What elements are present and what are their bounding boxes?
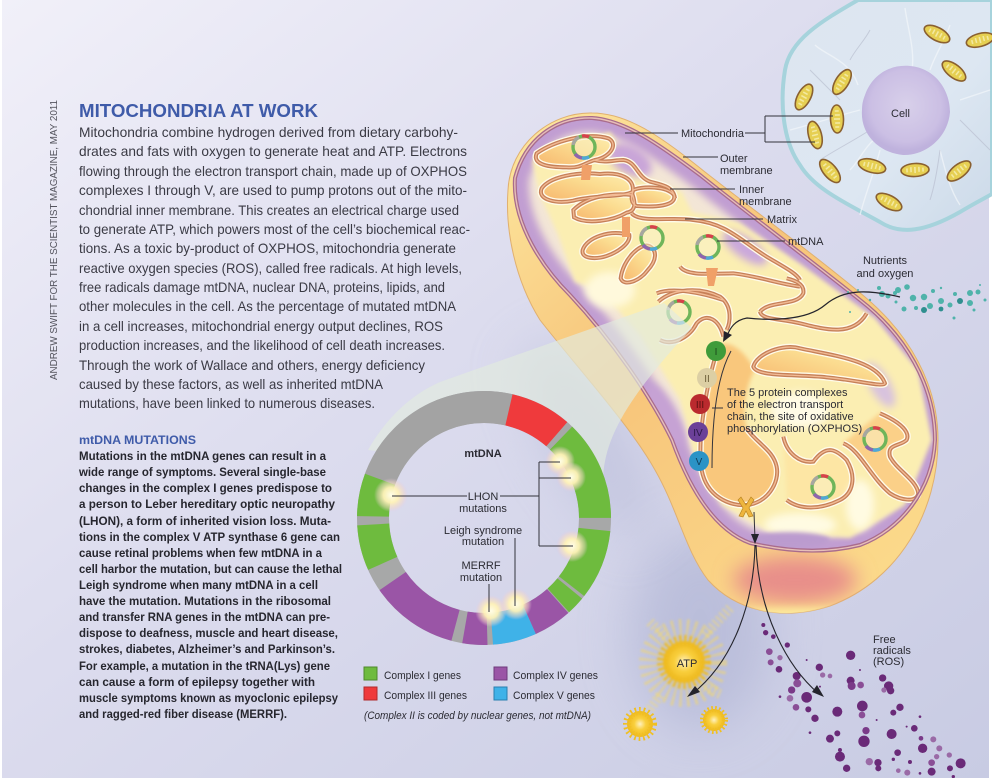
legend (364, 667, 598, 722)
cristae (536, 136, 918, 507)
mitochondrion labels: Nutrients (863, 255, 908, 267)
OXPHOS callout: phosphorylation (OXPHOS) (727, 423, 862, 435)
nutrients and oxygen dots (847, 284, 986, 320)
intro text: free radicals damage mtDNA, nuclear DNA, proteins, lipids, and (79, 279, 445, 295)
ATP burst (627, 608, 730, 737)
ATP label: ATP (677, 658, 697, 670)
legend: Complex V genes (513, 690, 595, 702)
intro text: tions. As a toxic by-product of OXPHOS, mitochondria generate (79, 240, 456, 256)
mitochondrion labels: Mitochondria (681, 128, 745, 140)
intro text: complexes I through V, are used to pump protons out of the mito- (79, 182, 467, 198)
free radicals (761, 623, 966, 778)
sidebar text: Leigh syndrome when many mtDNA in a cell (79, 580, 318, 592)
intro text: chondrial inner membrane. This creates an electrical charge used (79, 202, 459, 218)
ring labels: LHON (468, 491, 498, 503)
sidebar text: (LHON), a form of inherited vision loss. Muta- (79, 516, 331, 528)
OXPHOS callout: The 5 protein complexes (727, 387, 848, 399)
sidebar text: tions in the complex V ATP synthase 6 gene can (79, 532, 340, 544)
mitochondrion labels: Inner (739, 184, 764, 196)
mitochondrion labels: mtDNA (788, 236, 824, 248)
intro text: other molecules in the cell. As the percentage of mutated mtDNA (79, 298, 457, 314)
electron transport complexes: I (715, 347, 717, 358)
mitochondrion labels: Matrix (767, 214, 797, 226)
legend: Complex I genes (384, 670, 461, 682)
mitochondrion labels (625, 116, 913, 280)
arrows: ATP and ROS output (687, 512, 824, 697)
intro text: caused by these factors, as well as inherited mtDNA (79, 376, 384, 392)
credit line: ANDREW SWIFT FOR THE SCIENTIST MAGAZINE, MAY 2011 (49, 100, 60, 380)
small mitochondria (792, 22, 992, 214)
intro text: mutations, have been linked to numerous diseases. (79, 395, 375, 411)
intro text (79, 124, 470, 411)
sidebar text: dispose to deafness, muscle and heart disease, (79, 628, 338, 640)
sidebar text: cause retinal problems when few mtDNA in a (79, 548, 323, 560)
intro text: flowing through the electron transport chain, made up of OXPHOS (79, 163, 467, 179)
free radicals label: radicals (873, 645, 911, 657)
electron transport complexes (688, 341, 726, 471)
ring labels: mtDNA (464, 448, 502, 460)
free radicals label (873, 634, 911, 668)
sidebar text: have the mutation. Mutations in the ribosomal (79, 596, 331, 608)
electron transport complexes: V (696, 457, 703, 468)
sidebar text: strokes, diabetes, Alzheimer’s and Parkinson’s. (79, 644, 335, 656)
mtDNA ring (373, 407, 595, 629)
ring labels: mutation (460, 572, 502, 584)
ring labels: mutation (462, 536, 504, 548)
OXPHOS callout: of the electron transport (727, 399, 843, 411)
free radicals label: Free (873, 634, 896, 646)
OXPHOS callout (712, 351, 862, 468)
sidebar heading: mtDNA MUTATIONS (79, 433, 196, 447)
electron transport complexes: IV (693, 428, 703, 439)
sidebar text: Mutations in the mtDNA genes can result in a (79, 451, 327, 463)
legend note: (Complex II is coded by nuclear genes, not mtDNA) (364, 710, 591, 722)
electron transport complexes: II (704, 374, 710, 385)
sidebar text (78, 451, 342, 721)
zoom wedge (368, 303, 692, 480)
title: MITOCHONDRIA AT WORK (79, 101, 318, 121)
sidebar text: and transfer RNA genes in the mtDNA can pre- (79, 612, 330, 624)
ATP synthase (738, 497, 754, 517)
intro text: Through the work of Wallace and others, energy deficiency (79, 357, 425, 373)
ring leader lines (392, 462, 573, 612)
intro text: drates and fats with oxygen to generate heat and ATP. Electrons (79, 143, 467, 159)
intro text: to generate ATP, which powers most of the cell’s biochemical reac- (79, 221, 470, 237)
sidebar text: changes in the complex I genes predispose to (79, 483, 332, 495)
ring labels (444, 448, 522, 584)
legend: Complex III genes (384, 690, 467, 702)
sidebar text: can cause a form of epilepsy together with (79, 677, 315, 689)
OXPHOS callout: chain, the site of oxidative (727, 411, 854, 423)
sidebar text: For example, a mutation in the tRNA(Lys) gene (79, 661, 330, 673)
intro text: production increases, and the likelihood of cell death increases. (79, 337, 445, 353)
mutation glows (374, 446, 588, 627)
free radicals label: (ROS) (873, 656, 904, 668)
ring labels: Leigh syndrome (444, 525, 522, 537)
mtDNA minis (573, 136, 886, 498)
sidebar text: muscle symptoms known as myoclonic epilepsy (79, 693, 339, 705)
intro text: Mitochondria combine hydrogen derived from dietary carbohy- (79, 124, 458, 140)
mitochondrion labels: membrane (739, 196, 792, 208)
sidebar text: and ragged-red fiber disease (MERRF). (79, 709, 287, 721)
mitochondrion labels: and oxygen (857, 268, 913, 280)
sidebar text: cell harbor the mutation, but can cause the lethal (79, 564, 342, 576)
electron transport complexes: III (696, 400, 704, 411)
cell illustration (783, 0, 992, 230)
legend: Complex IV genes (513, 670, 598, 682)
ring labels: MERRF (461, 560, 501, 572)
ring labels: mutations (459, 503, 507, 515)
sidebar text: a person to Leber hereditary optic neuropathy (79, 499, 336, 511)
cell label: Cell (891, 108, 910, 120)
nucleus (862, 66, 950, 155)
intro text: in a cell increases, mitochondrial energy output declines, ROS (79, 318, 443, 334)
mitochondrion (507, 113, 938, 636)
sidebar text: wide range of symptoms. Several single-base (78, 467, 326, 479)
mitochondrion labels: membrane (720, 165, 773, 177)
intro text: reactive oxygen species (ROS), called free radicals. At high levels, (79, 260, 462, 276)
outer membrane rim (515, 118, 935, 551)
arrow: nutrients into mitochondrion (723, 292, 900, 342)
inner compartment (515, 118, 935, 551)
mitochondrion labels: Outer (720, 153, 748, 165)
